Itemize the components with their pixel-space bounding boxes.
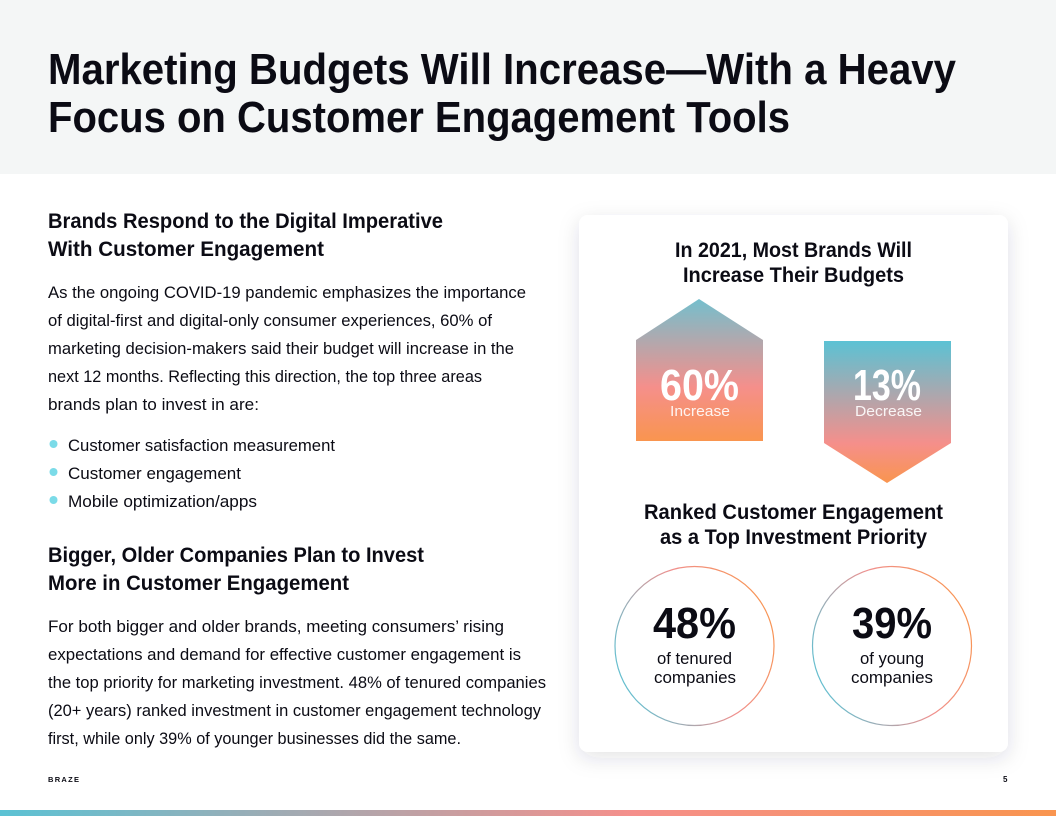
paragraph: digital-first budgets: of digital-first and digital-only consumer experiences, 60% of bbox=[48, 311, 492, 330]
heading: bigger older companies bbox=[48, 544, 424, 595]
paragraph: tenured vs younger bbox=[48, 617, 546, 748]
bullet list: investment areas: Mobile optimization/apps bbox=[68, 492, 257, 511]
footer brand: BRAZE bbox=[48, 775, 79, 784]
circle stat: 39% young: of young bbox=[860, 649, 924, 668]
icon: up arrow 60% increase: 60% bbox=[660, 361, 739, 410]
circle stat: 39% young bbox=[812, 566, 972, 726]
header band with title bbox=[0, 0, 1056, 174]
paragraph: tenured vs younger: (20+ years) ranked investment in customer engagement technology bbox=[48, 701, 541, 720]
circle stat: 39% young: companies bbox=[851, 668, 933, 687]
heading: brands respond bbox=[48, 210, 443, 261]
bullet list: investment areas: Customer engagement bbox=[68, 464, 241, 483]
left column section 2 bbox=[48, 544, 546, 748]
heading: most brands will increase: Increase Their Budgets bbox=[683, 264, 904, 287]
heading: bigger older companies: More in Customer Engagement bbox=[48, 572, 349, 595]
heading: ranked customer engagement bbox=[644, 501, 943, 549]
circle stat: 39% young: 39% bbox=[852, 599, 932, 648]
icon: up arrow 60% increase: Increase bbox=[670, 403, 730, 420]
heading: bigger older companies: Bigger, Older Companies Plan to Invest bbox=[48, 544, 424, 567]
icon: down arrow 13% decrease bbox=[824, 341, 951, 483]
paragraph: tenured vs younger: first, while only 39% of younger businesses did the same. bbox=[48, 729, 461, 748]
circle stat: 48% tenured: 48% bbox=[653, 599, 736, 648]
page number: 5 bbox=[1003, 775, 1008, 784]
paragraph: digital-first budgets bbox=[48, 283, 526, 414]
bullet list: investment areas: Customer satisfaction measurement bbox=[68, 436, 335, 455]
title bbox=[48, 45, 956, 142]
paragraph: digital-first budgets: next 12 months. Reflecting this direction, the top three areas bbox=[48, 367, 482, 386]
bottom gradient bar bbox=[0, 810, 1056, 816]
heading: brands respond: With Customer Engagement bbox=[48, 238, 324, 261]
heading: most brands will increase: In 2021, Most Brands Will bbox=[675, 239, 912, 262]
icon: up arrow 60% increase bbox=[636, 299, 763, 441]
panel: budget card bbox=[579, 215, 1008, 752]
bullet list: investment areas bbox=[50, 436, 335, 511]
title: Marketing Budgets Will Increase—With a Heavy bbox=[48, 45, 956, 94]
icon: down arrow 13% decrease: Decrease bbox=[855, 403, 922, 420]
paragraph: tenured vs younger: For both bigger and older brands, meeting consumers’ rising bbox=[48, 617, 504, 636]
circle stat: 48% tenured: of tenured bbox=[657, 649, 732, 668]
circle stat: 48% tenured bbox=[615, 566, 774, 726]
heading: brands respond: Brands Respond to the Digital Imperative bbox=[48, 210, 443, 233]
heading: ranked customer engagement: Ranked Customer Engagement bbox=[644, 501, 943, 524]
heading: most brands will increase bbox=[675, 239, 912, 287]
left column section 1 bbox=[48, 210, 526, 511]
icon: down arrow 13% decrease: 13% bbox=[853, 361, 921, 410]
heading: ranked customer engagement: as a Top Investment Priority bbox=[660, 526, 927, 549]
paragraph: digital-first budgets: brands plan to invest in are: bbox=[48, 395, 259, 414]
circle stat: 48% tenured: companies bbox=[654, 668, 736, 687]
paragraph: digital-first budgets: marketing decision-makers said their budget will increase in the bbox=[48, 339, 514, 358]
paragraph: tenured vs younger: the top priority for marketing investment. 48% of tenured companies bbox=[48, 673, 546, 692]
paragraph: tenured vs younger: expectations and demand for effective customer engagement is bbox=[48, 645, 521, 664]
title: Focus on Customer Engagement Tools bbox=[48, 93, 790, 142]
paragraph: digital-first budgets: As the ongoing COVID-19 pandemic emphasizes the importance bbox=[48, 283, 526, 302]
